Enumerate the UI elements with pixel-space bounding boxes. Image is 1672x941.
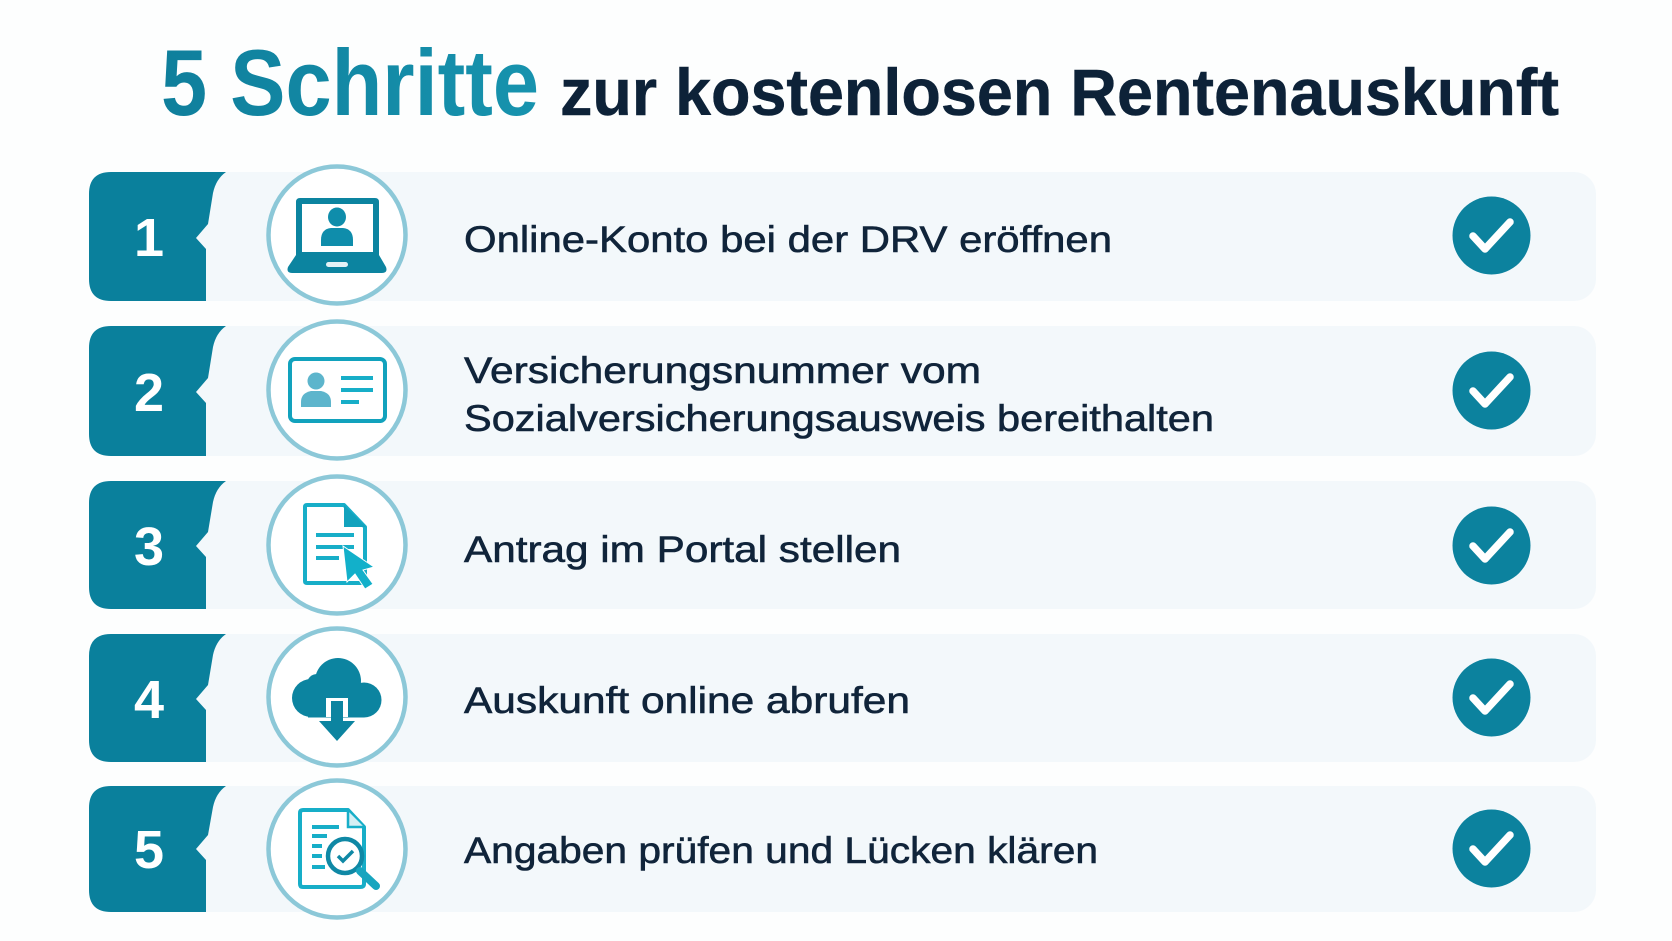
step number: 3 xyxy=(134,517,164,577)
icon: document with magnifier xyxy=(268,780,406,918)
icon: check mark xyxy=(1452,196,1530,274)
step text: Auskunft online abrufen xyxy=(464,679,910,721)
icon: document with cursor xyxy=(268,476,406,614)
number tab xyxy=(89,326,226,456)
step number: 1 xyxy=(134,208,164,268)
row background xyxy=(89,172,1596,301)
icon: check mark xyxy=(1452,352,1530,430)
icon: cloud download xyxy=(268,628,406,766)
icon: check mark xyxy=(1452,810,1530,888)
number tab xyxy=(89,634,226,762)
step text: Online-Konto bei der DRV eröffnen xyxy=(464,218,1112,260)
icon: check mark xyxy=(1452,506,1530,584)
panel: step 1 xyxy=(89,166,1596,304)
row background xyxy=(89,786,1596,912)
number tab xyxy=(89,172,226,301)
icon: check mark xyxy=(1452,658,1530,736)
icon: ID card xyxy=(268,322,406,458)
title: 5 Schritte xyxy=(161,30,539,135)
step number: 2 xyxy=(134,363,164,423)
panel: step 5 xyxy=(89,780,1596,918)
step number: 5 xyxy=(134,820,164,880)
row background xyxy=(89,481,1596,609)
row background xyxy=(89,326,1596,456)
panel: step 3 xyxy=(89,476,1596,614)
step text line 2: Sozialversicherungsausweis bereithalten xyxy=(464,397,1214,439)
panel: step 2 xyxy=(89,322,1596,458)
number tab xyxy=(89,481,226,609)
step text: Angaben prüfen und Lücken klären xyxy=(464,829,1098,871)
panel: step 4 xyxy=(89,628,1596,766)
icon: laptop with user xyxy=(268,166,406,304)
step number: 4 xyxy=(134,670,164,730)
title: zur kostenlosen Rentenauskunft xyxy=(560,55,1559,129)
title xyxy=(161,30,1559,135)
step text: Antrag im Portal stellen xyxy=(464,528,901,570)
number tab xyxy=(89,786,226,912)
row background xyxy=(89,634,1596,762)
step text: Versicherungsnummer vom xyxy=(464,349,981,391)
